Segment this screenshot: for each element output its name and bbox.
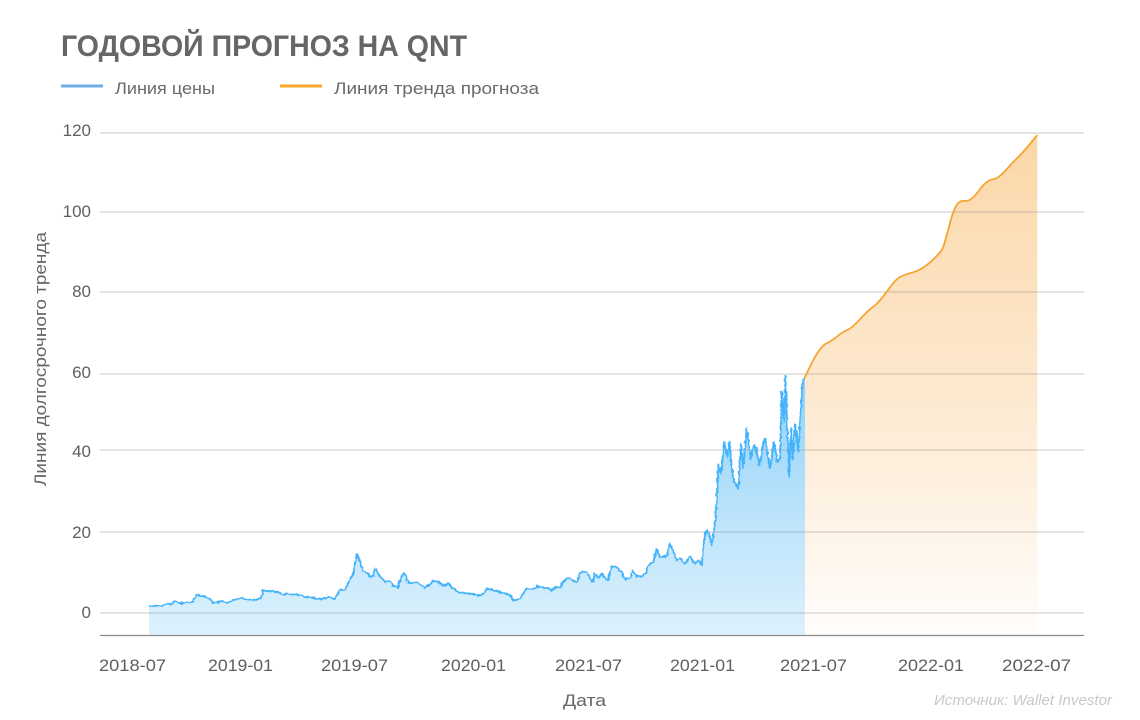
x axis tick labels: 2021-07 xyxy=(780,656,847,675)
x axis tick labels: 2020-01 xyxy=(441,656,506,675)
horizontal grid lines xyxy=(100,133,1084,613)
source note: Источник: Wallet Investor xyxy=(934,693,1113,709)
x axis tick labels: 2021-07 xyxy=(555,656,622,675)
y axis tick labels: 80 xyxy=(72,282,91,301)
legend xyxy=(61,79,540,98)
x axis tick labels: 2018-07 xyxy=(99,656,166,675)
x axis tick labels: 2019-01 xyxy=(208,656,273,675)
y axis tick labels: 40 xyxy=(72,442,91,461)
y axis tick labels: 20 xyxy=(72,523,91,542)
x axis tick labels xyxy=(99,656,1071,675)
x axis tick labels: 2021-01 xyxy=(670,656,735,675)
y axis tick labels: 120 xyxy=(63,121,91,140)
area: forecast fill xyxy=(805,135,1037,635)
y axis title: Линия долгосрочного тренда xyxy=(32,231,50,486)
forecast trend line xyxy=(804,135,1037,378)
x axis tick labels: 2022-01 xyxy=(898,656,964,675)
price line xyxy=(149,376,805,606)
title: ГОДОВОЙ ПРОГНОЗ НА QNT xyxy=(61,29,467,63)
legend: forecast trend line: Линия тренда прогноза xyxy=(334,79,540,98)
x axis tick labels: 2022-07 xyxy=(1002,656,1071,675)
x axis tick labels: 2019-07 xyxy=(321,656,388,675)
y axis tick labels: 0 xyxy=(82,603,91,622)
legend: price line: Линия цены xyxy=(115,79,215,98)
area: price fill xyxy=(149,376,805,635)
y axis tick labels: 60 xyxy=(72,363,91,382)
x axis title: Дата xyxy=(563,691,607,710)
y axis tick labels: 100 xyxy=(63,202,91,221)
x axis line xyxy=(100,634,1084,636)
y axis tick labels xyxy=(63,121,91,622)
